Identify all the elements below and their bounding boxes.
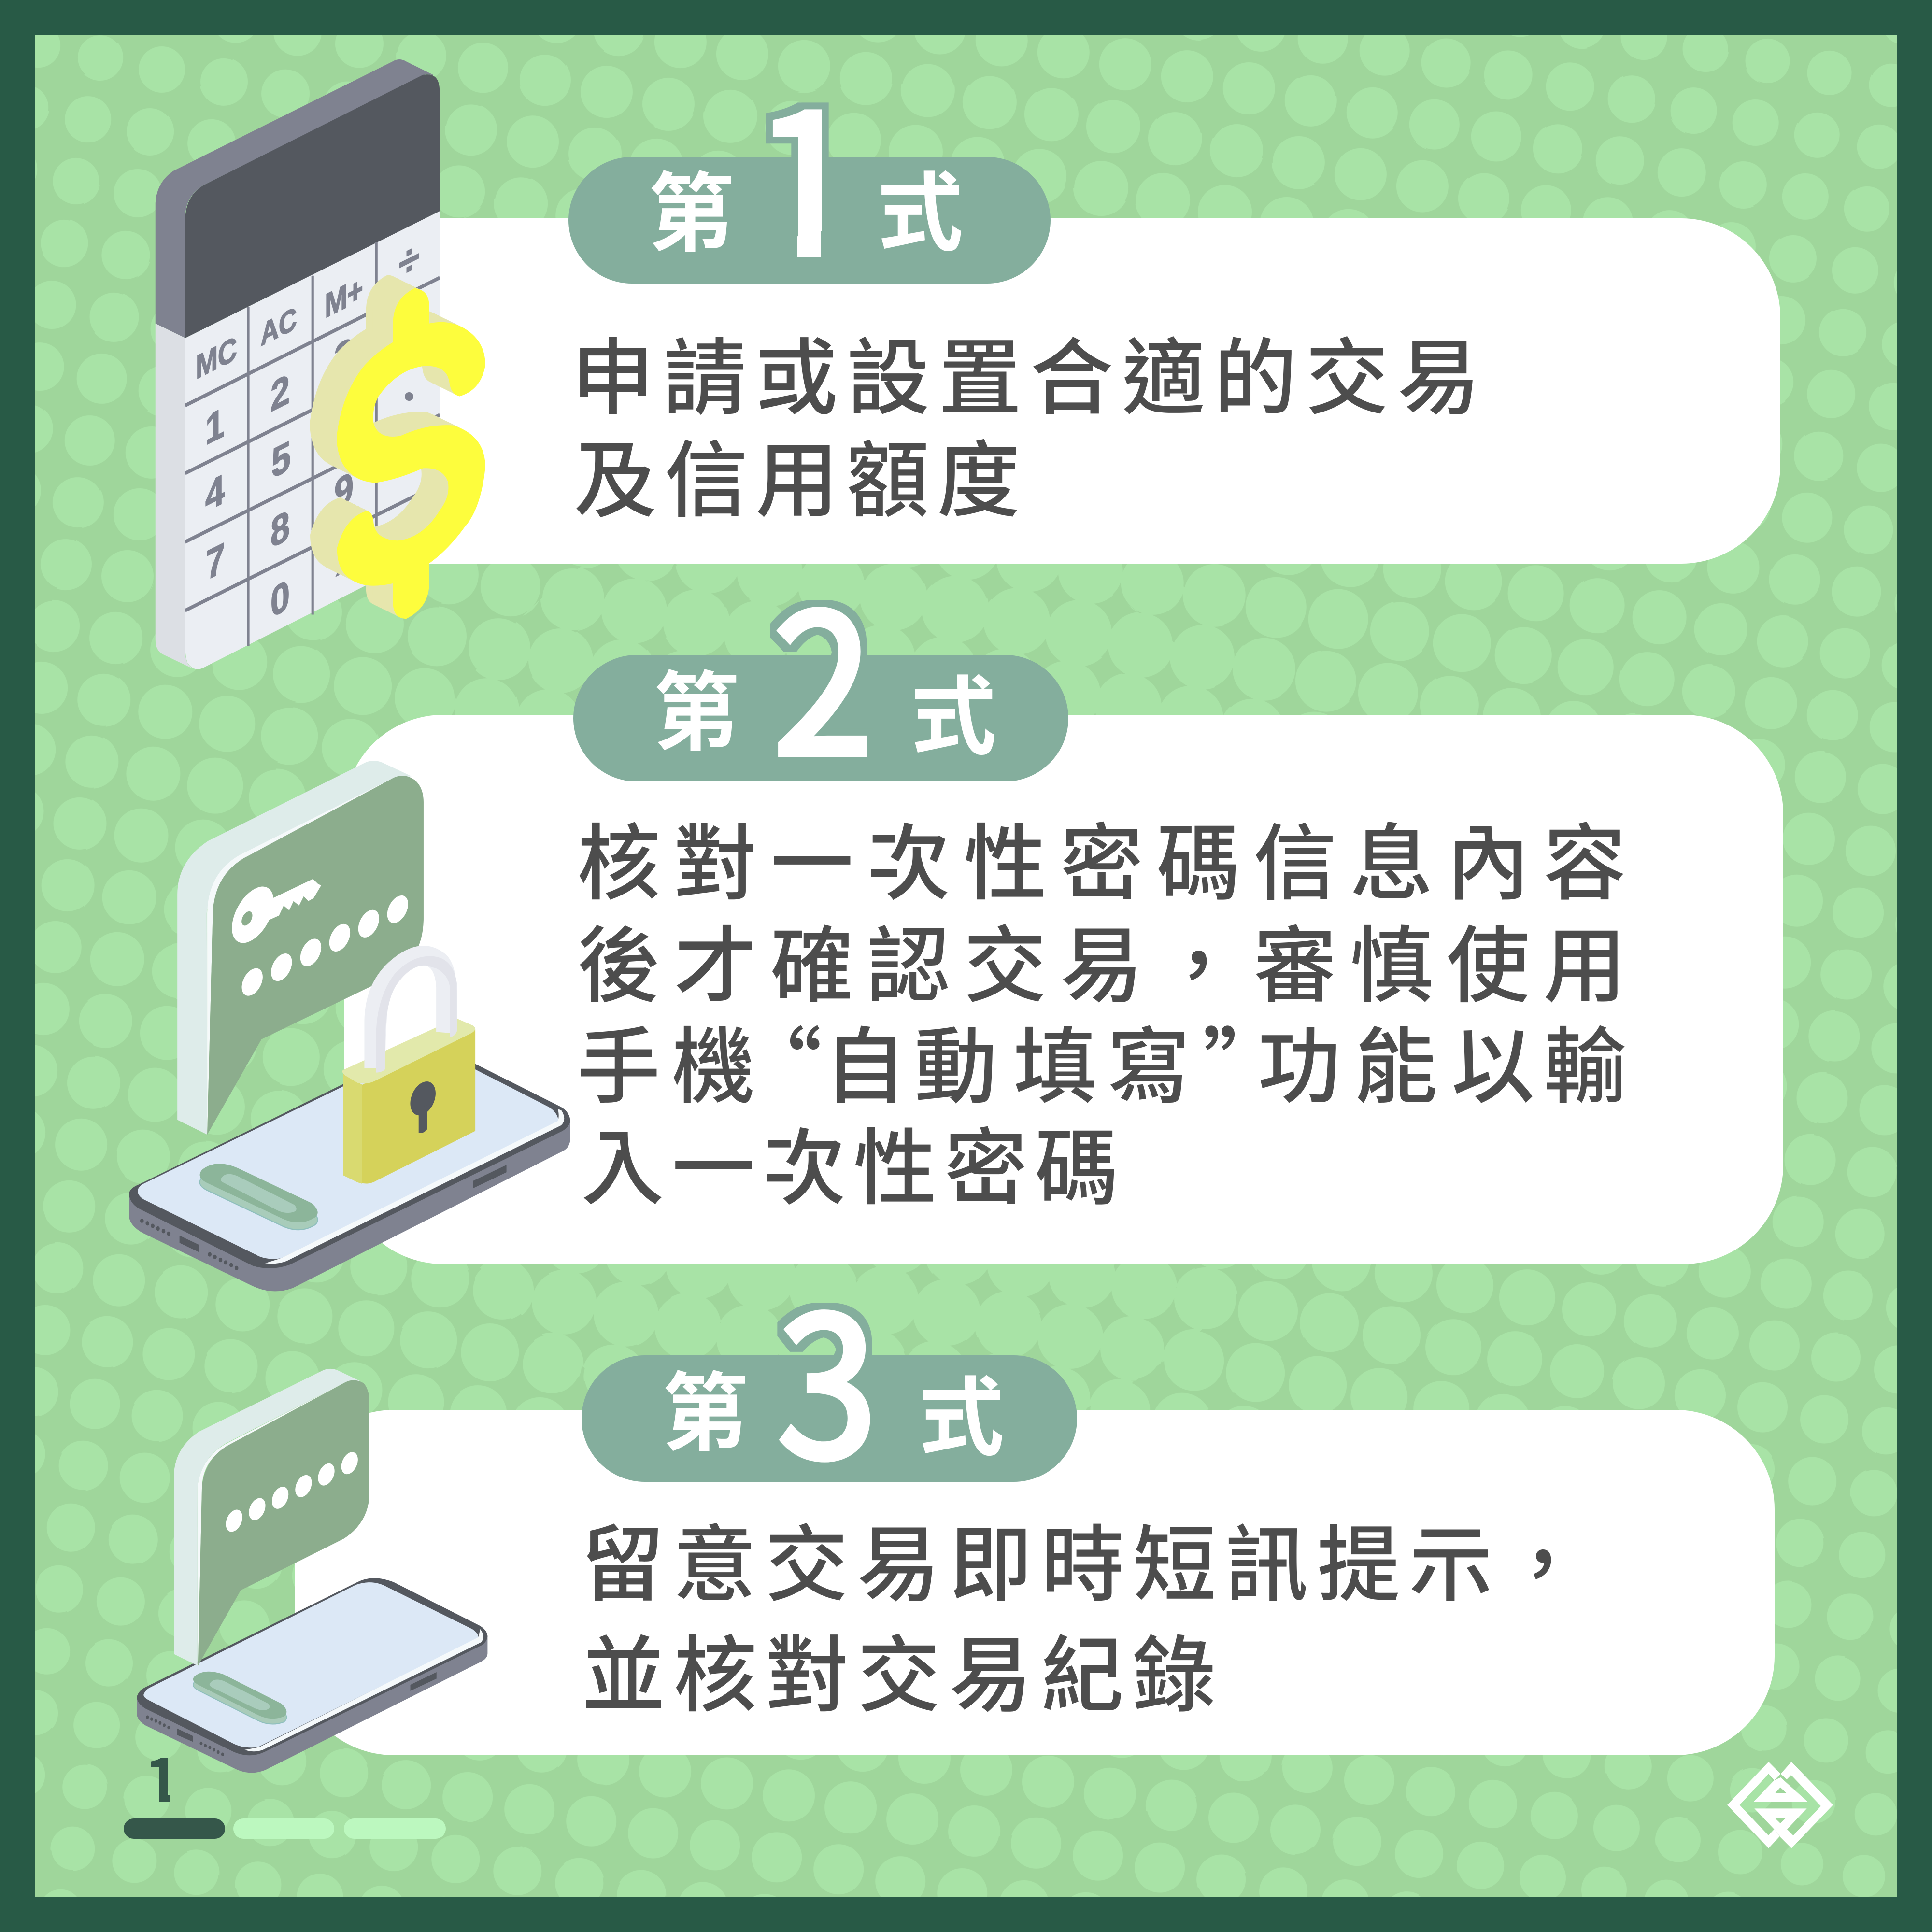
calculator key labels: MC: [196, 328, 237, 386]
calculator key labels: 7: [206, 533, 225, 590]
panel 3: white card: [295, 1410, 1775, 1755]
heading tag 2: 第2式: 第: [653, 644, 739, 768]
calculator key labels: ÷: [398, 231, 420, 289]
panel 2 body text: 手機“自動填寫”功能以輸: [577, 999, 1627, 1120]
panel 2 body text: 後才確認交易，審慎使用: [577, 898, 1640, 1019]
panel 2 body text: [577, 796, 1640, 1222]
panel 2: white card: [344, 715, 1783, 1264]
calculator key labels: 8: [270, 500, 290, 557]
panel 2 body text: 核對一次性密碼信息內容: [577, 796, 1640, 917]
icon: calculator with dollar sign: [156, 59, 485, 670]
panel 3 body text: 留意交易即時短訊提示，: [581, 1497, 1593, 1618]
panel 1 body text: 申請或設置合適的交易: [571, 311, 1489, 431]
progress bar 2: [233, 1818, 334, 1839]
panel 1 body text: 及信用額度: [574, 413, 1028, 534]
panel 1 body text: [571, 311, 1489, 534]
logo: interlocking diamonds: [1727, 1762, 1833, 1848]
page number: 1: [144, 1733, 180, 1819]
heading tag 3: 第3式: 3: [778, 1233, 877, 1513]
calculator key labels: 4: [205, 464, 225, 521]
progress bar 3: [344, 1818, 446, 1839]
heading tag 1: 第1式: 1: [753, 30, 860, 310]
calculator key labels: 0: [270, 570, 290, 627]
calculator key labels: 3: [334, 327, 354, 384]
heading tag 2: 第2式: 式: [910, 648, 996, 772]
icon: phone with key bubble and padlock: [129, 761, 570, 1291]
speech bubble with dots: [174, 1369, 369, 1666]
progress bar active: [124, 1818, 225, 1839]
calculator key labels: 5: [271, 431, 291, 488]
phone: [137, 1578, 487, 1773]
heading tag 2: 第2式: [573, 530, 1068, 810]
icon: phone with message bubble: [137, 1369, 487, 1773]
heading tag 1: 第1式: 第: [648, 145, 734, 269]
calculator key labels: [196, 231, 420, 627]
calculator key labels: 2: [270, 364, 290, 421]
speech bubble with key and password dots: [177, 761, 424, 1135]
calculator key labels: 9: [334, 462, 354, 519]
page indicator: [124, 1758, 446, 1839]
padlock: [342, 946, 475, 1184]
calculator body: [156, 59, 440, 670]
heading tag 2: 第2式: 2: [773, 530, 873, 810]
calculator key labels: AC: [260, 300, 297, 354]
heading tag 3: 第3式: [582, 1233, 1077, 1513]
calculator key labels: %: [331, 534, 357, 586]
panel 3 body text: 並核對交易紀錄: [582, 1608, 1224, 1729]
calculator key labels: M+: [325, 269, 363, 326]
heading tag 3: 第3式: 式: [918, 1349, 1004, 1473]
heading tag 1: 第1式: 式: [877, 144, 963, 269]
dollar sign: [310, 275, 485, 619]
panel 3 body text: [581, 1497, 1593, 1729]
heading tag 1: 第1式: [568, 102, 1051, 284]
phone: [129, 1044, 570, 1291]
panel 1: white card: [270, 218, 1780, 564]
calculator key labels: 1: [205, 398, 225, 455]
heading tag 3: 第3式: 第: [662, 1345, 748, 1469]
panel 2 body text: 入一次性密碼: [581, 1101, 1126, 1222]
